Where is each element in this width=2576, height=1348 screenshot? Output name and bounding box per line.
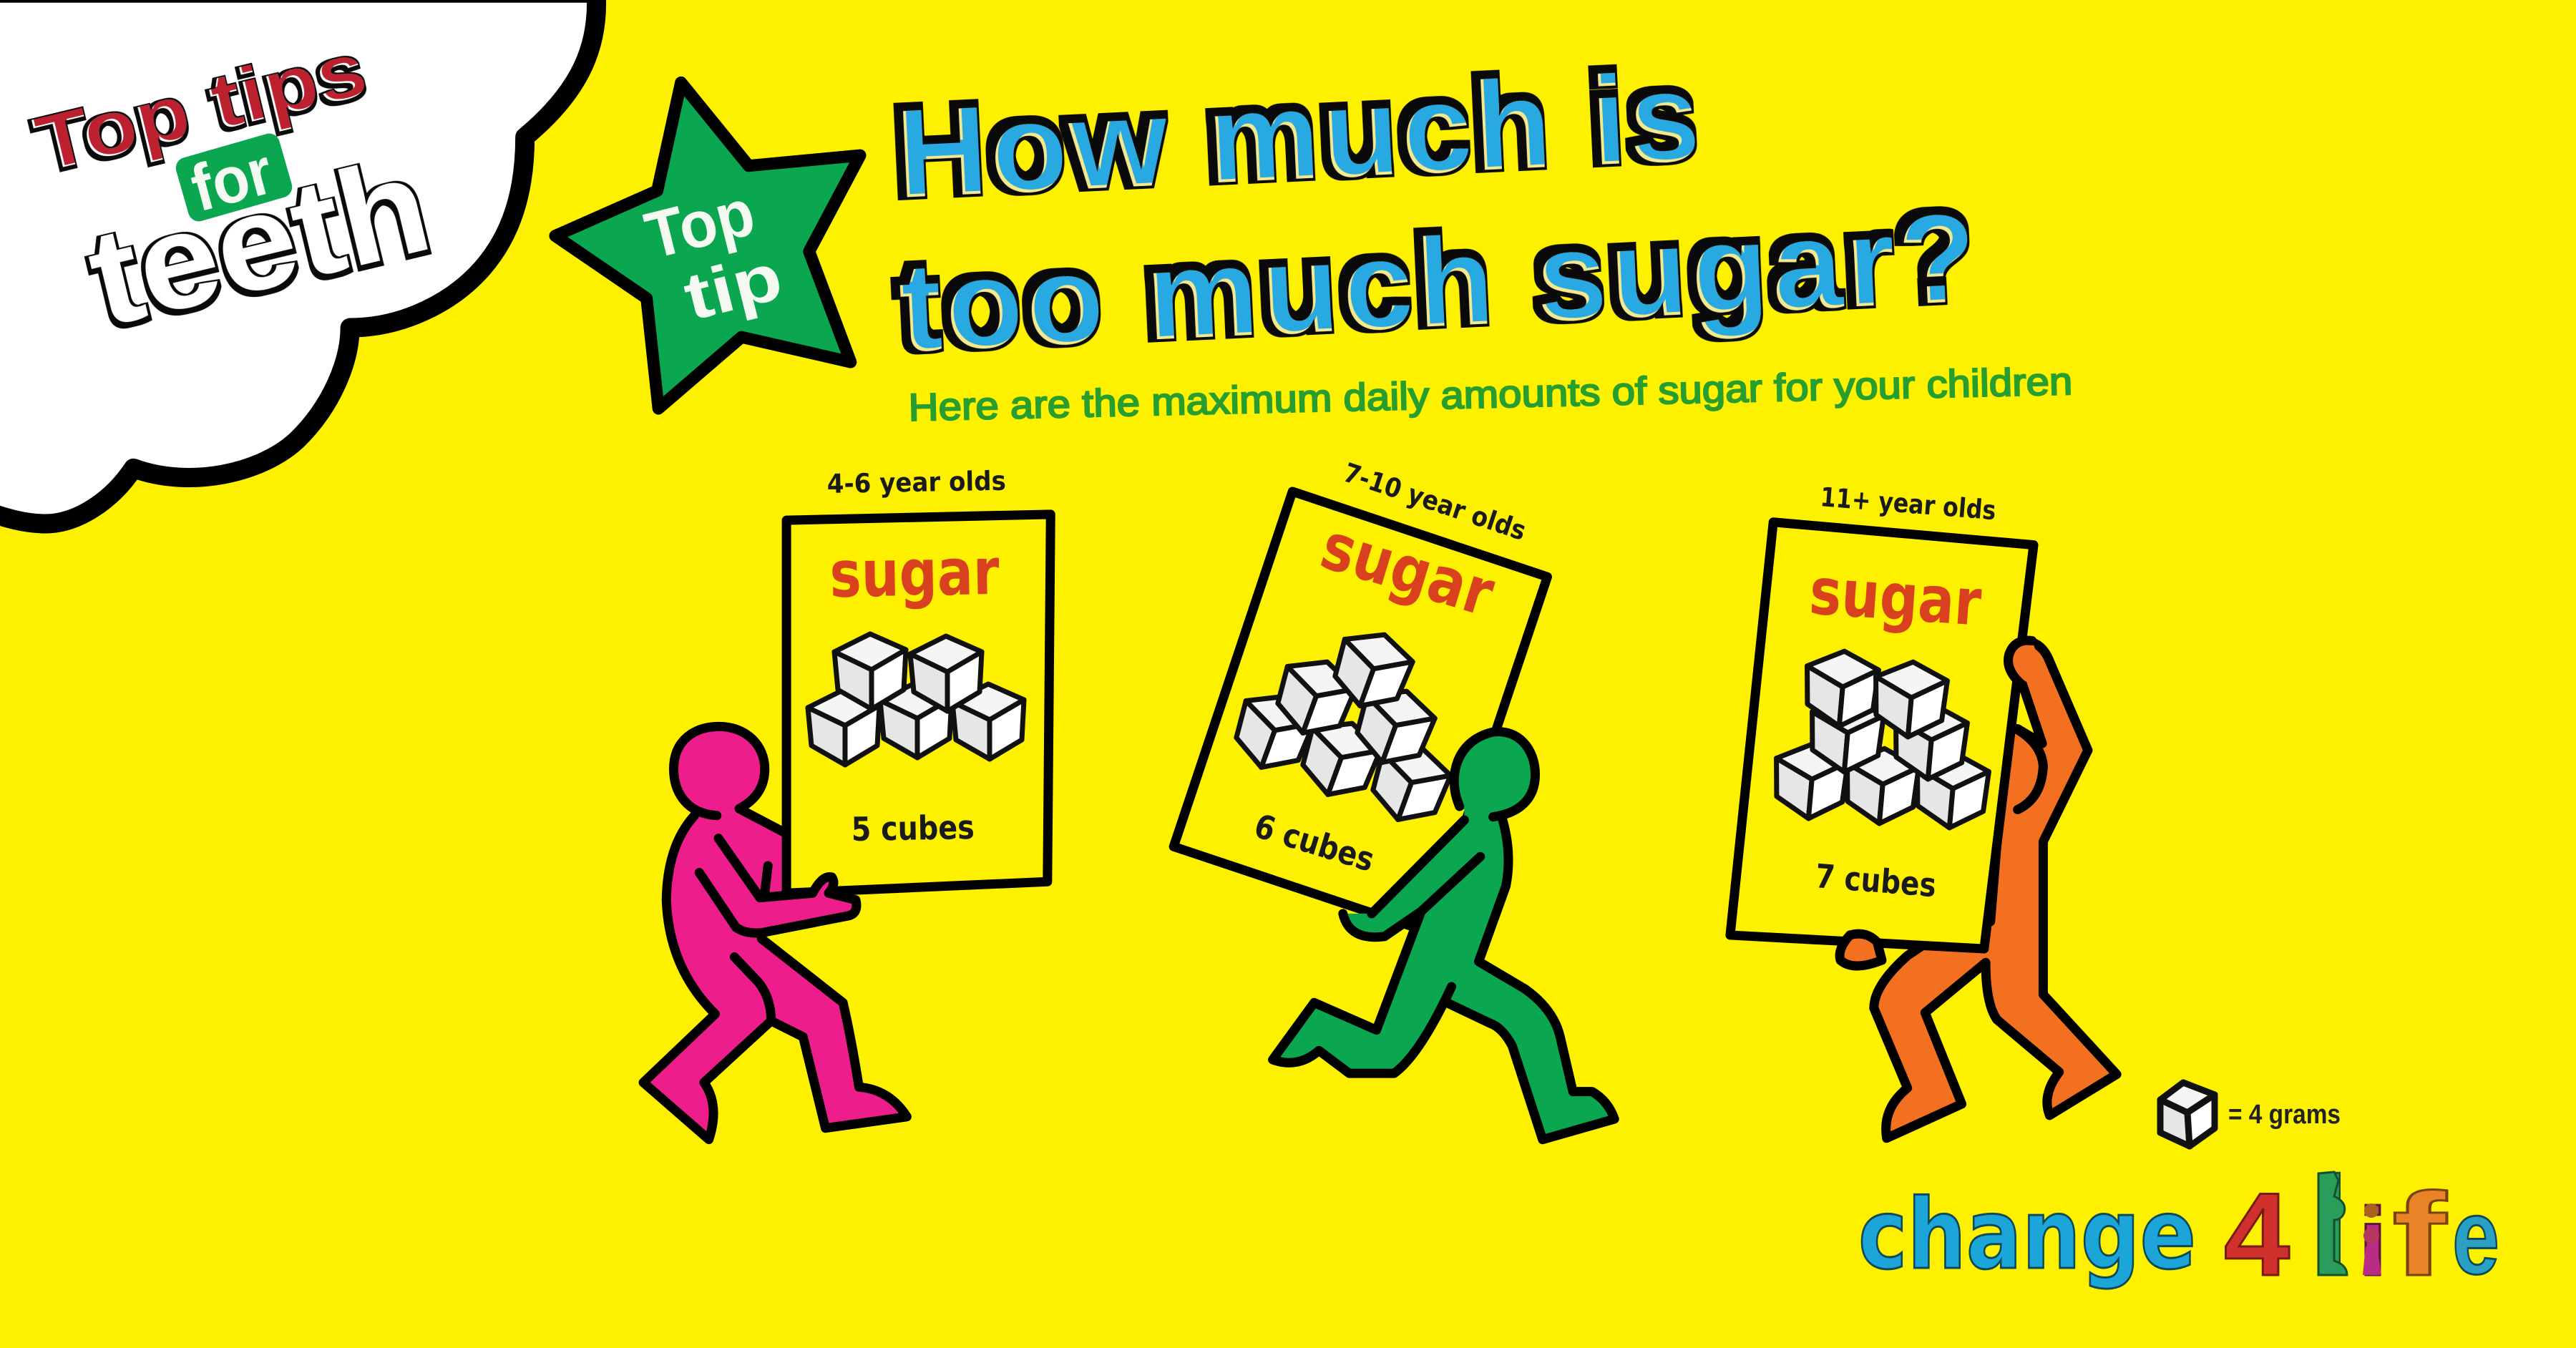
logo: change 4 life: f	[2392, 1168, 2447, 1300]
panel: 7-10 year olds, green figure	[1174, 457, 1614, 1140]
panel: 4-6 year olds, pink figure	[643, 466, 1050, 1140]
logo: change 4 life: change	[1858, 1178, 2196, 1291]
heading: teeth: teeth	[75, 128, 443, 356]
green figure	[1273, 732, 1614, 1140]
sugar word: sugar	[1313, 509, 1503, 632]
sugar cubes	[1772, 648, 1990, 831]
logo: change 4 life: e	[2452, 1176, 2499, 1296]
for badge: for	[184, 135, 280, 225]
sugar cubes	[1226, 622, 1456, 831]
green figure details of letter l	[2318, 1172, 2347, 1275]
legend: cube equals 4 grams	[2160, 1083, 2341, 1146]
title line 2: too much sugar?	[897, 188, 1979, 378]
age label: 11+ year olds	[1819, 482, 1997, 526]
icon: top tip star: Top	[638, 176, 761, 273]
subtitle: Here are the maximum daily amounts of sugar for your children	[908, 360, 2073, 429]
sugar word: sugar	[1807, 554, 1984, 641]
sugar board 3	[1730, 522, 2034, 949]
logo: change 4 life: l	[2316, 1148, 2348, 1305]
icon: top tip star: tip	[677, 240, 789, 334]
cube count: 6 cubes	[1250, 806, 1379, 879]
logo: change 4 life: 4	[2224, 1168, 2290, 1300]
age label: 7-10 year olds	[1340, 457, 1530, 547]
panel: cloud badge	[0, 0, 597, 524]
logo: change 4 life	[1858, 1148, 2499, 1305]
figure details of letter i	[2363, 1203, 2381, 1275]
pink figure body	[643, 726, 907, 1140]
orange figure body	[1874, 641, 2117, 1138]
logo: change 4 life: i	[2358, 1188, 2387, 1296]
age label: 4-6 year olds	[826, 466, 1006, 499]
cube count: 7 cubes	[1814, 856, 1938, 904]
cube count: 5 cubes	[851, 808, 975, 849]
heading: top tips: Top tips	[26, 25, 374, 187]
sugar word: sugar	[829, 534, 1000, 612]
sugar board 2	[1174, 492, 1547, 932]
pink figure arm and hand	[699, 839, 859, 934]
panel: 11+ year olds, orange figure	[1730, 482, 2117, 1138]
orange figure hands	[1840, 640, 2041, 966]
sugar cubes	[808, 634, 1024, 765]
title line 1: How much is	[894, 47, 1702, 225]
icon: top tip star	[555, 82, 860, 409]
legend: cube equals 4 grams: = 4 grams	[2228, 1100, 2341, 1130]
sugar board 1	[786, 514, 1050, 893]
cloud shape	[0, 0, 597, 524]
